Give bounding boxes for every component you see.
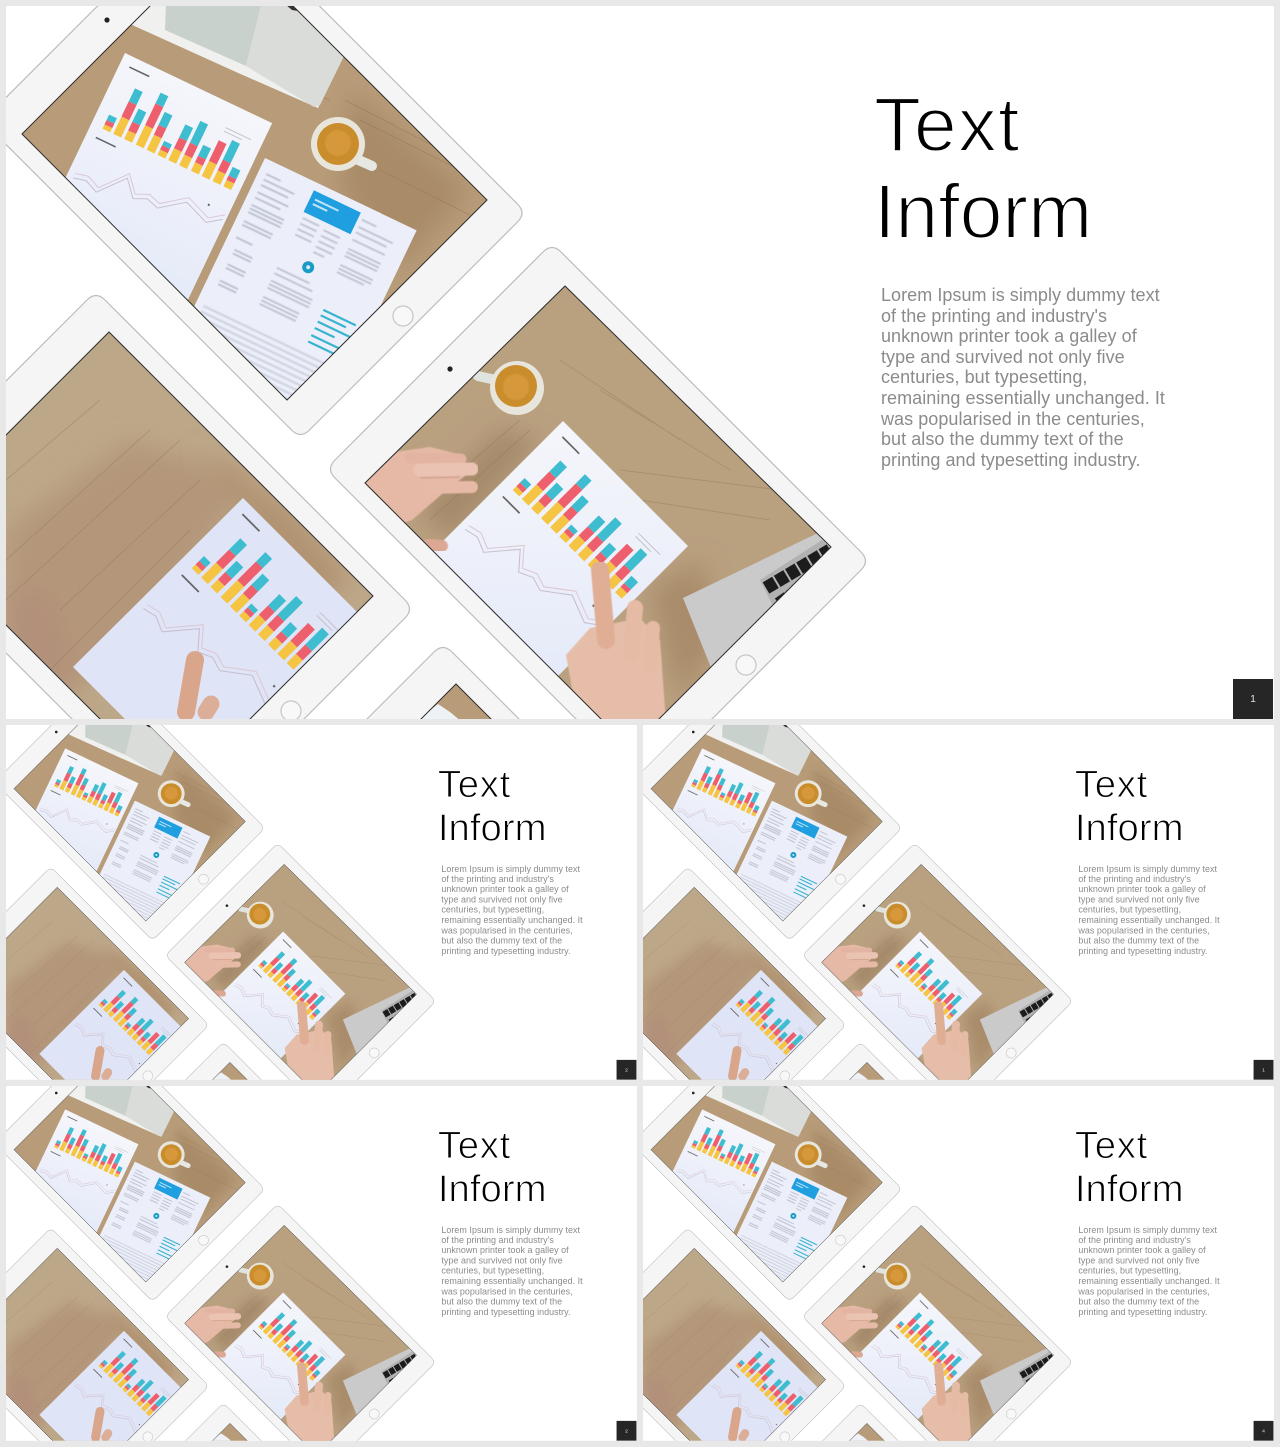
body text: Lorem Ipsum is simply dummy text (1078, 864, 1217, 874)
body text: remaining essentially unchanged. It (1078, 1276, 1220, 1286)
body text: of the printing and industry's (1078, 1235, 1191, 1245)
body text: type and survived not only five (441, 1256, 563, 1266)
body text: remaining essentially unchanged. It (1078, 915, 1220, 925)
body text: type and survived not only five (881, 347, 1125, 367)
body text: of the printing and industry's (441, 874, 554, 884)
body text (441, 864, 583, 956)
body text: unknown printer took a galley of (441, 1245, 569, 1255)
body text: unknown printer took a galley of (881, 326, 1137, 346)
tablet: top left with charts and laptop (2, 2, 522, 447)
title (874, 82, 1092, 255)
title: Text (874, 82, 1021, 168)
body text: of the printing and industry's (1078, 874, 1191, 884)
body text: of the printing and industry's (881, 306, 1107, 326)
body text: but also the dummy text of the (1078, 1297, 1199, 1307)
chart paper (386, 421, 688, 722)
body text: remaining essentially unchanged. It (441, 1276, 583, 1286)
body text: type and survived not only five (441, 895, 563, 905)
slide 4: bottom left thumbnail (6, 1086, 637, 1441)
body text: was popularised in the centuries, (881, 409, 1145, 429)
page number: 4 (1262, 1428, 1265, 1434)
body text: printing and typesetting industry. (1078, 946, 1208, 956)
title: Text (1075, 763, 1148, 806)
laptop (130, 2, 344, 108)
slide 1: large main panel (6, 6, 1274, 719)
tablet: right with hands, cup and laptop (330, 248, 866, 722)
body text: Lorem Ipsum is simply dummy text (441, 1225, 580, 1235)
body text (441, 1225, 583, 1317)
title: Inform (438, 1167, 547, 1210)
body text: but also the dummy text of the (441, 1297, 562, 1307)
body text: printing and typesetting industry. (441, 946, 571, 956)
page number: 1 (1250, 694, 1256, 705)
body text: remaining essentially unchanged. It (881, 388, 1165, 408)
tablet: lower left with chart and finger (2, 296, 410, 730)
title (438, 1124, 547, 1210)
title (1075, 763, 1184, 849)
body text: Lorem Ipsum is simply dummy text (1078, 1225, 1217, 1235)
page number (1254, 1421, 1273, 1441)
tablets image (6, 725, 434, 1080)
coffee cup (311, 117, 372, 171)
home button (281, 701, 301, 721)
title: Text (438, 1124, 511, 1167)
slide 2: top left thumbnail (6, 725, 637, 1080)
hand: pointing (566, 570, 666, 722)
body text: centuries, but typesetting, (881, 367, 1087, 387)
body text: printing and typesetting industry. (441, 1307, 571, 1317)
report paper (162, 158, 417, 447)
laptop (683, 531, 840, 670)
body text: was popularised in the centuries, (441, 1286, 573, 1296)
body text: centuries, but typesetting, (1078, 1266, 1181, 1276)
tablets scene (2, 2, 866, 730)
body text: was popularised in the centuries, (1078, 1286, 1210, 1296)
body text: Lorem Ipsum is simply dummy text (881, 285, 1160, 305)
body text: centuries, but typesetting, (441, 905, 544, 915)
body text: unknown printer took a galley of (1078, 884, 1206, 894)
home button (736, 655, 756, 675)
body text (1078, 864, 1220, 956)
body text: but also the dummy text of the (881, 429, 1124, 449)
body text: printing and typesetting industry. (1078, 1307, 1208, 1317)
body text (1078, 1225, 1220, 1317)
camera (447, 366, 453, 372)
title (1075, 1124, 1184, 1210)
slide 3: top right thumbnail (643, 725, 1274, 1080)
slide 5: bottom right thumbnail (643, 1086, 1274, 1441)
chart paper (73, 498, 370, 730)
page number: 2 (625, 1067, 628, 1073)
body text: type and survived not only five (1078, 895, 1200, 905)
body text: unknown printer took a galley of (1078, 1245, 1206, 1255)
tablets image (6, 1086, 434, 1441)
body text: was popularised in the centuries, (441, 925, 573, 935)
tablets image (643, 725, 1071, 1080)
page number: 1 (1262, 1067, 1265, 1073)
body text (881, 285, 1165, 470)
title: Inform (1075, 1167, 1184, 1210)
home button (393, 306, 413, 326)
body text: printing and typesetting industry. (881, 450, 1141, 470)
body text: was popularised in the centuries, (1078, 925, 1210, 935)
page number (617, 1060, 636, 1080)
title: Inform (874, 169, 1092, 255)
chart paper (25, 53, 272, 333)
finger (186, 660, 211, 712)
title: Inform (438, 806, 547, 849)
tablet: bottom partial (364, 648, 522, 722)
hand: left resting (355, 447, 472, 546)
body text: unknown printer took a galley of (441, 884, 569, 894)
body text: centuries, but typesetting, (1078, 905, 1181, 915)
page number (1233, 679, 1273, 719)
page number (1254, 1060, 1273, 1080)
title: Text (1075, 1124, 1148, 1167)
tablets image (643, 1086, 1071, 1441)
body text: remaining essentially unchanged. It (441, 915, 583, 925)
body text: of the printing and industry's (441, 1235, 554, 1245)
page number: 2 (625, 1428, 628, 1434)
title (438, 763, 547, 849)
body text: centuries, but typesetting, (441, 1266, 544, 1276)
body text: but also the dummy text of the (441, 936, 562, 946)
body text: type and survived not only five (1078, 1256, 1200, 1266)
camera (104, 17, 110, 23)
body text: Lorem Ipsum is simply dummy text (441, 864, 580, 874)
title: Inform (1075, 806, 1184, 849)
title: Text (438, 763, 511, 806)
body text: but also the dummy text of the (1078, 936, 1199, 946)
coffee cup (478, 361, 544, 415)
page number (617, 1421, 636, 1441)
